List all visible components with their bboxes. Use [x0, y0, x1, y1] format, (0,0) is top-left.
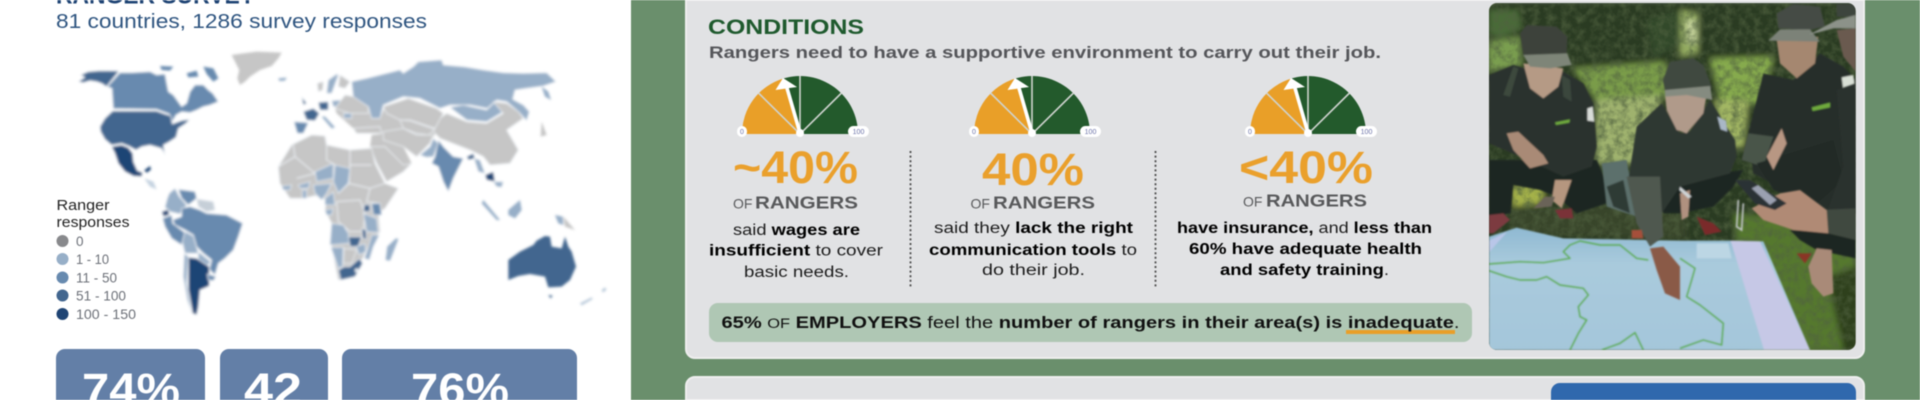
stat: 40% of rangers: 40% — [982, 144, 1084, 195]
text: communication tools: said they lack the right — [934, 220, 1133, 237]
legend item: 1-10: 1 - 10 — [76, 252, 109, 267]
world map — [78, 52, 606, 315]
ranger 4 and hands with device — [1735, 4, 1856, 297]
ranger 2 — [1602, 58, 1743, 300]
callout: employers — [709, 303, 1472, 342]
stat box: 74% — [56, 349, 205, 400]
callout: employers: 65% OF EMPLOYERS feel the number of rangers in their area(s) is inadequate . — [722, 314, 1459, 332]
text: insurance: have insurance, and less than — [1177, 220, 1432, 237]
heading: conditions: CONDITIONS — [708, 16, 864, 39]
stat: <40% of rangers: OF — [1243, 194, 1262, 210]
legend item: 51-100: 51 - 100 — [76, 288, 126, 304]
legend item: 100-150: 100 - 150 — [76, 307, 136, 322]
gauge 3 — [1245, 76, 1377, 137]
Americas map shapes — [78, 52, 282, 315]
stat: <40% of rangers: <40% — [1239, 142, 1373, 193]
stat: ~40% of rangers: RANGERS — [755, 192, 858, 212]
divider 2 — [1154, 151, 1156, 287]
ranger 3 — [1742, 4, 1856, 213]
text: wages: said wages are — [733, 222, 860, 239]
text: communication tools — [929, 220, 1137, 279]
photo: rangers around a map — [1480, 0, 1880, 353]
ranger 1 — [1489, 25, 1608, 233]
text: wages: insufficient to cover — [709, 242, 883, 260]
gauge 3: 0 — [1248, 129, 1252, 136]
text: insurance — [1177, 220, 1432, 279]
gauge 2: 100 — [1085, 129, 1096, 136]
divider 1 — [910, 151, 912, 287]
blue header box — [1551, 383, 1856, 400]
map legend — [56, 198, 136, 322]
legend item: 0: 0 — [76, 234, 84, 249]
stat box: 42 — [220, 349, 328, 400]
stat: ~40% of rangers: OF — [733, 196, 752, 212]
stat: 40% of rangers — [970, 144, 1095, 212]
panel: next section — [686, 377, 1864, 400]
subheading: Rangers need to have a supportive environment to carry out their job. — [709, 44, 1381, 62]
stat: ~40% of rangers — [733, 142, 858, 212]
panel: ranger survey — [0, 0, 631, 400]
gauge 1: 0 — [740, 129, 744, 136]
text: insurance: 60% have adequate health — [1189, 241, 1422, 258]
stat: ~40% of rangers: ~40% — [733, 142, 858, 193]
forest and grass backdrop — [1480, 0, 1880, 353]
gauge 2: 0 — [972, 129, 976, 136]
legend item: 11-50: 11 - 50 — [76, 270, 117, 286]
text: wages — [709, 222, 883, 281]
Eurasia, Africa and Oceania map shapes — [278, 60, 606, 305]
gauge 2 — [969, 76, 1101, 137]
gauge 1 — [737, 76, 869, 137]
text: communication tools: communication tools to — [929, 242, 1137, 259]
text: insurance: and safety training . — [1220, 262, 1389, 279]
stat: 40% of rangers: RANGERS — [993, 192, 1095, 212]
gauge 3: 100 — [1361, 129, 1372, 136]
stat: 40% of rangers: OF — [970, 196, 990, 212]
stat box: 76% — [342, 349, 577, 400]
map sheet — [1489, 228, 1810, 350]
map legend: responses — [56, 215, 130, 231]
panel: conditions — [686, 0, 1880, 358]
legend title: Ranger — [56, 198, 110, 214]
stat: <40% of rangers: RANGERS — [1266, 190, 1367, 210]
stat: <40% of rangers — [1239, 142, 1373, 210]
subheading: survey size: 81 countries, 1286 survey responses — [56, 11, 427, 33]
gauge 1: 100 — [853, 129, 864, 136]
text: communication tools: do their job. — [982, 262, 1085, 279]
green page background — [631, 0, 1920, 400]
text: wages: basic needs. — [744, 264, 849, 281]
